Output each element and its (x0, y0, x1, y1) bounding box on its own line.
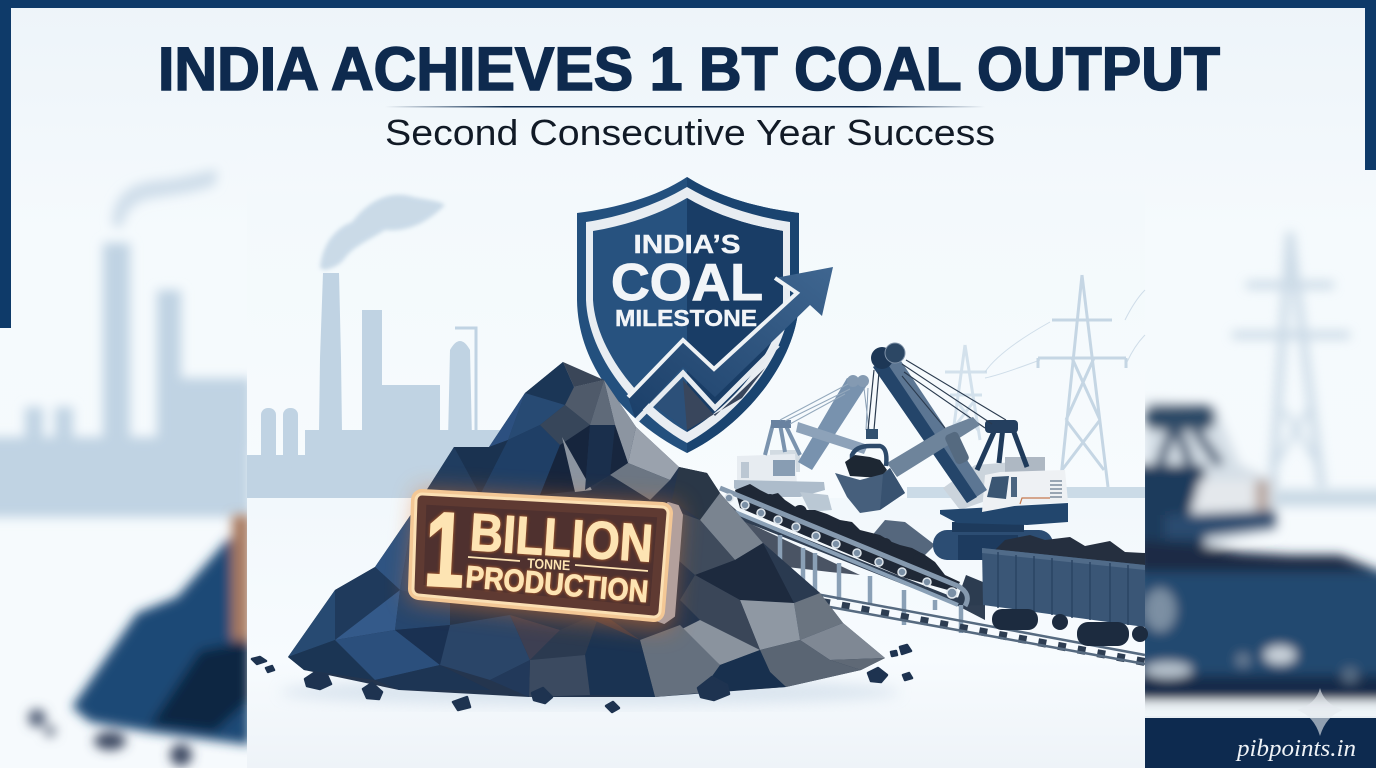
conveyor belt with coal (720, 484, 985, 633)
A-frame (977, 425, 1027, 470)
sign text: BILLION (468, 503, 655, 574)
site name: pibpoints.in (1235, 736, 1356, 762)
pulleys (871, 347, 893, 369)
power pylons (907, 275, 1145, 498)
shield title: MILESTONE (615, 305, 757, 331)
sign text glow: PRODUCTION (464, 559, 650, 609)
sign text: PRODUCTION (464, 559, 650, 609)
sign text: 1 (422, 490, 468, 610)
wagon wheels (992, 609, 1148, 646)
hoist ropes (868, 370, 879, 430)
panel: central scene (247, 148, 1148, 768)
crawler tracks (933, 530, 1053, 560)
label glow (408, 490, 680, 630)
blurred right backdrop (1135, 232, 1376, 720)
growth arrow (628, 267, 833, 418)
coal wagon (982, 548, 1145, 627)
subtitle: Second Consecutive Year Success (385, 112, 995, 153)
coal pile: low-poly mountain (288, 362, 885, 697)
cab (982, 470, 1068, 512)
main excavator (835, 343, 1148, 646)
title divider (385, 106, 985, 108)
shield: India's Coal Milestone (577, 177, 833, 453)
sign text glow: BILLION (468, 503, 655, 574)
ground shadow (280, 678, 900, 706)
icon: four-point star (1297, 688, 1343, 736)
blurred left backdrop (0, 170, 251, 766)
top frame bar (0, 0, 1376, 8)
shield title (611, 229, 763, 331)
sign text (422, 490, 655, 610)
lower chevron line (637, 345, 778, 420)
sign text: TONNE (527, 555, 571, 573)
shield title: INDIA’S (634, 229, 740, 259)
chevron fill (648, 368, 765, 430)
shield title: COAL (611, 254, 763, 312)
boom (873, 355, 987, 503)
dipper stick (887, 417, 980, 477)
left frame bar (0, 0, 11, 328)
sign text glow (422, 490, 655, 610)
bucket (852, 446, 886, 470)
coal rocks (252, 645, 912, 712)
sign: 1 Billion Tonne Production (419, 490, 682, 623)
background excavator (734, 375, 869, 512)
deck (940, 503, 1068, 525)
title: INDIA ACHIEVES 1 BT COAL OUTPUT (158, 35, 1220, 103)
railway track (816, 594, 1145, 664)
boom cables (902, 360, 1006, 428)
wagon coal (995, 535, 1145, 567)
factory silhouette (247, 195, 502, 498)
footer brand tab (1145, 688, 1376, 768)
right frame bar (1365, 0, 1376, 170)
sign text glow: 1 (422, 490, 468, 610)
